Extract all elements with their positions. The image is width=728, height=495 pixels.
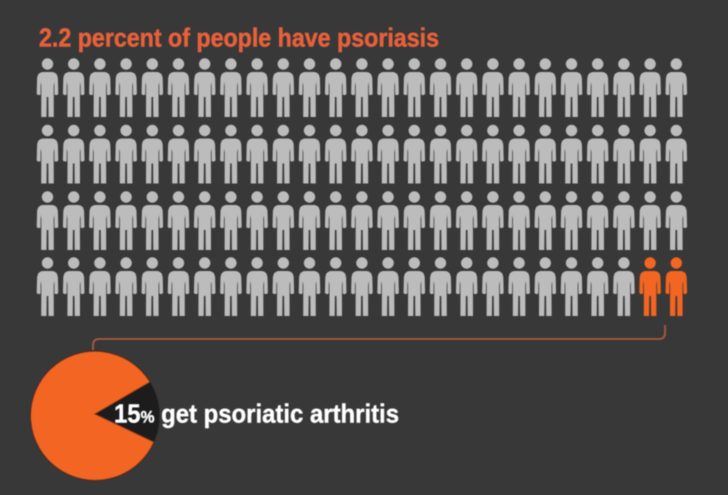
pie orange slice	[31, 351, 154, 480]
row 4 of people with two orange figures	[37, 257, 687, 316]
row 3 of people	[37, 191, 687, 250]
row 1 of people	[37, 58, 687, 117]
people grid: 100 figures, 2 highlighted	[37, 58, 687, 316]
pie dark slice	[95, 382, 160, 442]
title: 2.2 percent of people have psoriasis	[39, 22, 439, 52]
pie chart: 15 percent	[31, 351, 160, 480]
connector line from orange figures to pie	[93, 325, 665, 350]
row 2 of people	[37, 125, 687, 184]
callout: 15% get psoriatic arthritis: 15% get psoriatic arthritis	[114, 398, 399, 428]
